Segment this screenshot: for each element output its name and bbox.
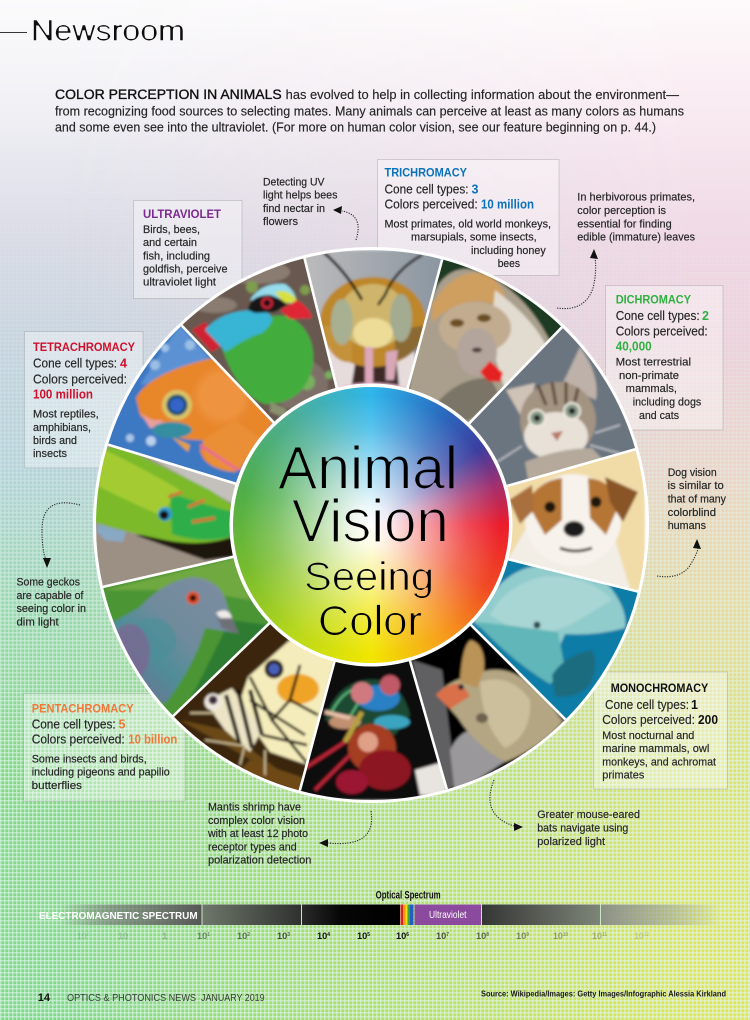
callout: bats: bats navigate using: [537, 823, 628, 835]
photo: goldfish: [108, 326, 273, 482]
text: monochromacy: monkeys, and achromat: [602, 756, 716, 768]
panel: dichromacy box: [606, 286, 723, 430]
spectrum tick labels: 10: [197, 931, 208, 942]
text: dichromacy: non-primate: [619, 370, 679, 382]
center title: Vision: [292, 488, 449, 555]
label: electromagnetic spectrum: ELECTROMAGNETIC SPECTRUM: [39, 910, 198, 922]
electromagnetic spectrum bar: [39, 904, 721, 925]
text: dichromacy: Colors perceived:: [616, 325, 708, 339]
photo: beluga: [472, 560, 638, 720]
text: dichromacy: 2: [702, 309, 709, 323]
text: monochromacy: MONOCHROMACY: [611, 681, 708, 695]
text: dichromacy: and cats: [639, 410, 679, 422]
spectrum tick labels: 10: [563, 932, 568, 938]
text: tetrachromacy: amphibians,: [33, 422, 91, 434]
spectrum tick labels: 10: [118, 931, 128, 942]
spectrum tick labels: 10: [553, 931, 564, 942]
spectrum tick labels: 6: [406, 932, 409, 938]
spectrum tick labels: 10: [592, 931, 603, 942]
text: trichromacy: TRICHROMACY: [384, 166, 467, 180]
callout: primates: [577, 192, 695, 244]
spectrum tick labels: 10: [396, 931, 407, 942]
spectrum tick labels: 1: [162, 931, 168, 942]
spectrum tick labels: 3: [287, 932, 290, 938]
arrow: geckos: [42, 503, 80, 568]
spectrum tick labels: 10: [516, 931, 527, 942]
text: pentachromacy: PENTACHROMACY: [32, 702, 134, 716]
text: dichromacy: mammals,: [626, 383, 677, 395]
panel: ultraviolet box: [134, 200, 242, 298]
spectrum tick labels: 10: [277, 931, 288, 942]
text: monochromacy: Most nocturnal and: [602, 730, 694, 742]
text: pentachromacy: Cone cell types:: [32, 717, 116, 731]
text: pentachromacy: including pigeons and papilio: [32, 767, 170, 779]
callout: primates: color perception is: [577, 205, 666, 217]
wheel spokes: [103, 258, 638, 791]
text: dichromacy: DICHROMACY: [616, 292, 691, 306]
text: pentachromacy: 5: [118, 717, 126, 731]
intro text: [55, 87, 684, 134]
footer: publication: JANUARY 2019: [201, 993, 265, 1004]
text: ultraviolet: fish, including: [143, 250, 210, 262]
callout: bats: [537, 809, 640, 848]
spectrum tick labels: 10: [476, 931, 487, 942]
spectrum tick labels: 8: [486, 932, 489, 938]
text: pentachromacy: 10 billion: [128, 732, 177, 746]
spectrum tick labels: 10: [634, 931, 645, 942]
text: dichromacy: Cone cell types:: [616, 309, 700, 323]
text: tetrachromacy: insects: [33, 448, 67, 460]
spectrum tick labels: 10: [237, 931, 248, 942]
callout: dogs: colorblind: [668, 507, 716, 519]
text: monochromacy: Cone cell types:: [605, 698, 689, 712]
photo wheel: [92, 247, 649, 803]
callout: mantis shrimp: [207, 802, 311, 867]
callout: geckos: Some geckos: [16, 577, 80, 589]
text: trichromacy: marsupials, some insects,: [411, 232, 537, 244]
intro text: and some even see into the ultraviolet. (For more on human color vision, see our feature beginning on p. 44.): [55, 120, 656, 134]
text: tetrachromacy: TETRACHROMACY: [33, 340, 135, 354]
callout: geckos: [16, 577, 86, 628]
arrow: mantis shrimp: [319, 811, 372, 847]
text: monochromacy: 1: [691, 698, 698, 712]
spectrum tick labels: 7: [446, 932, 449, 938]
callout: bats: Greater mouse-eared: [537, 809, 640, 821]
text: dichromacy: 40,000: [616, 340, 652, 354]
text: ultraviolet: ULTRAVIOLET: [143, 207, 222, 221]
photo: bird: [182, 258, 336, 422]
photo: mantis shrimp: [295, 655, 450, 800]
intro text: has evolved to help in collecting information about the environment—: [286, 88, 680, 102]
text: trichromacy: including honey: [471, 245, 546, 257]
text: dichromacy: Most terrestrial: [616, 357, 691, 369]
panel: pentachromacy box: [24, 694, 185, 801]
text: monochromacy: [602, 681, 718, 782]
center title: [278, 434, 458, 644]
text: trichromacy: bees: [498, 258, 520, 270]
text: tetrachromacy: Cone cell types:: [33, 357, 117, 371]
text: monochromacy: 200: [698, 713, 718, 727]
spectrum tick labels: 11: [602, 932, 607, 938]
heading: Newsroom: Newsroom: [31, 15, 185, 48]
arrow: bats: [490, 780, 523, 831]
text: trichromacy: 3: [472, 182, 478, 196]
panel: tetrachromacy box: [24, 332, 143, 468]
text: trichromacy: Colors perceived:: [384, 198, 478, 212]
callout: geckos: dim light: [16, 616, 59, 628]
callout: mantis shrimp: receptor types and: [208, 841, 297, 853]
arrow: primates: [557, 249, 598, 309]
callout: bees: [263, 177, 338, 228]
text: pentachromacy: [32, 702, 177, 792]
text: trichromacy: 10 million: [481, 198, 534, 212]
callout: dogs: Dog vision: [668, 467, 717, 479]
spectrum tick labels: 10: [436, 931, 447, 942]
panel: monochromacy box: [594, 672, 728, 789]
photo: pigeon: [103, 558, 268, 716]
spectrum tick labels: 10: [77, 931, 88, 942]
callout: dogs: is similar to: [668, 480, 724, 492]
callout: dogs: that of many: [668, 494, 726, 506]
callout: dogs: [668, 467, 726, 532]
text: pentachromacy: Some insects and birds,: [32, 753, 147, 765]
intro text: COLOR PERCEPTION IN ANIMALS: [55, 87, 282, 102]
text: pentachromacy: butterflies: [32, 780, 83, 792]
spectrum tick labels: 5: [367, 932, 370, 938]
center color wheel: [233, 387, 509, 663]
arrow: dogs: [657, 539, 701, 577]
photo: dog: [500, 445, 645, 595]
text: tetrachromacy: 100 million: [33, 387, 93, 401]
callout: mantis shrimp: polarization detection: [208, 855, 311, 867]
callout: bats: polarized light: [537, 836, 605, 848]
center title: Color: [318, 597, 422, 644]
text: tetrachromacy: 4: [120, 357, 127, 371]
arrow: bees: [333, 206, 358, 240]
callout: bees: find nectar in: [263, 203, 325, 215]
callout: mantis shrimp: Mantis shrimp have: [208, 802, 301, 814]
text: trichromacy: [384, 166, 551, 270]
text: tetrachromacy: Most reptiles,: [33, 409, 99, 421]
callout: bees: light helps bees: [263, 190, 338, 202]
spectrum tick labels: 2: [87, 932, 89, 938]
text: tetrachromacy: [33, 340, 135, 460]
spectrum tick labels: 4: [327, 932, 330, 938]
callout: mantis shrimp: with at least 12 photo: [207, 828, 308, 840]
photo: butterfly: [170, 620, 340, 795]
text: monochromacy: primates: [602, 770, 645, 782]
text: ultraviolet: goldfish, perceive: [143, 264, 228, 276]
spectrum tick labels: 12: [644, 932, 649, 938]
text: ultraviolet: [143, 207, 228, 288]
text: trichromacy: Most primates, old world monkeys,: [384, 218, 551, 230]
text: tetrachromacy: Colors perceived:: [33, 372, 127, 386]
label: optical spectrum: Optical Spectrum: [376, 889, 441, 901]
callout: bees: flowers: [263, 216, 299, 228]
callout: primates: In herbivorous primates,: [577, 192, 695, 204]
callout: geckos: are capable of: [16, 590, 84, 602]
spectrum tick labels: 10: [357, 931, 368, 942]
callout: bees: Detecting UV: [263, 177, 325, 189]
callout: geckos: seeing color in: [16, 603, 86, 615]
spectrum tick labels: 10: [317, 931, 328, 942]
label: ultraviolet band: Ultraviolet: [429, 909, 467, 921]
center title: Animal: [278, 434, 458, 501]
photo: cat: [470, 327, 636, 485]
spectrum tick labels: 2: [247, 932, 250, 938]
photo: gecko: [96, 444, 236, 586]
callout: primates: edible (immature) leaves: [577, 232, 695, 244]
photo: monkey: [408, 259, 562, 422]
text: trichromacy: Cone cell types:: [384, 182, 468, 196]
text: monochromacy: Colors perceived:: [602, 713, 695, 727]
text: ultraviolet: ultraviolet light: [143, 276, 216, 288]
text: tetrachromacy: birds and: [33, 435, 77, 447]
spectrum tick labels: [77, 931, 649, 942]
text: monochromacy: marine mammals, owl: [602, 743, 709, 755]
panel: trichromacy box: [378, 160, 559, 276]
text: ultraviolet: and certain: [143, 237, 197, 249]
photo: bat: [411, 626, 566, 790]
text: ultraviolet: Birds, bees,: [143, 224, 200, 236]
spectrum tick labels: 1: [207, 932, 210, 938]
footer: page number: 14: [38, 992, 51, 1004]
text: pentachromacy: Colors perceived:: [32, 732, 125, 746]
callout: primates: essential for finding: [577, 218, 672, 230]
text: dichromacy: [616, 292, 709, 422]
center title: Seeing: [304, 555, 434, 599]
spectrum tick labels: 9: [526, 932, 529, 938]
callout: mantis shrimp: complex color vision: [208, 815, 305, 827]
callout: dogs: humans: [668, 520, 706, 532]
footer: publication: OPTICS & PHOTONICS NEWS: [67, 993, 196, 1004]
intro text: from recognizing food sources to selecting mates. Many animals can perceive at least as many colors as humans: [55, 104, 684, 118]
photo: bee: [304, 250, 442, 388]
text: dichromacy: including dogs: [633, 397, 702, 409]
